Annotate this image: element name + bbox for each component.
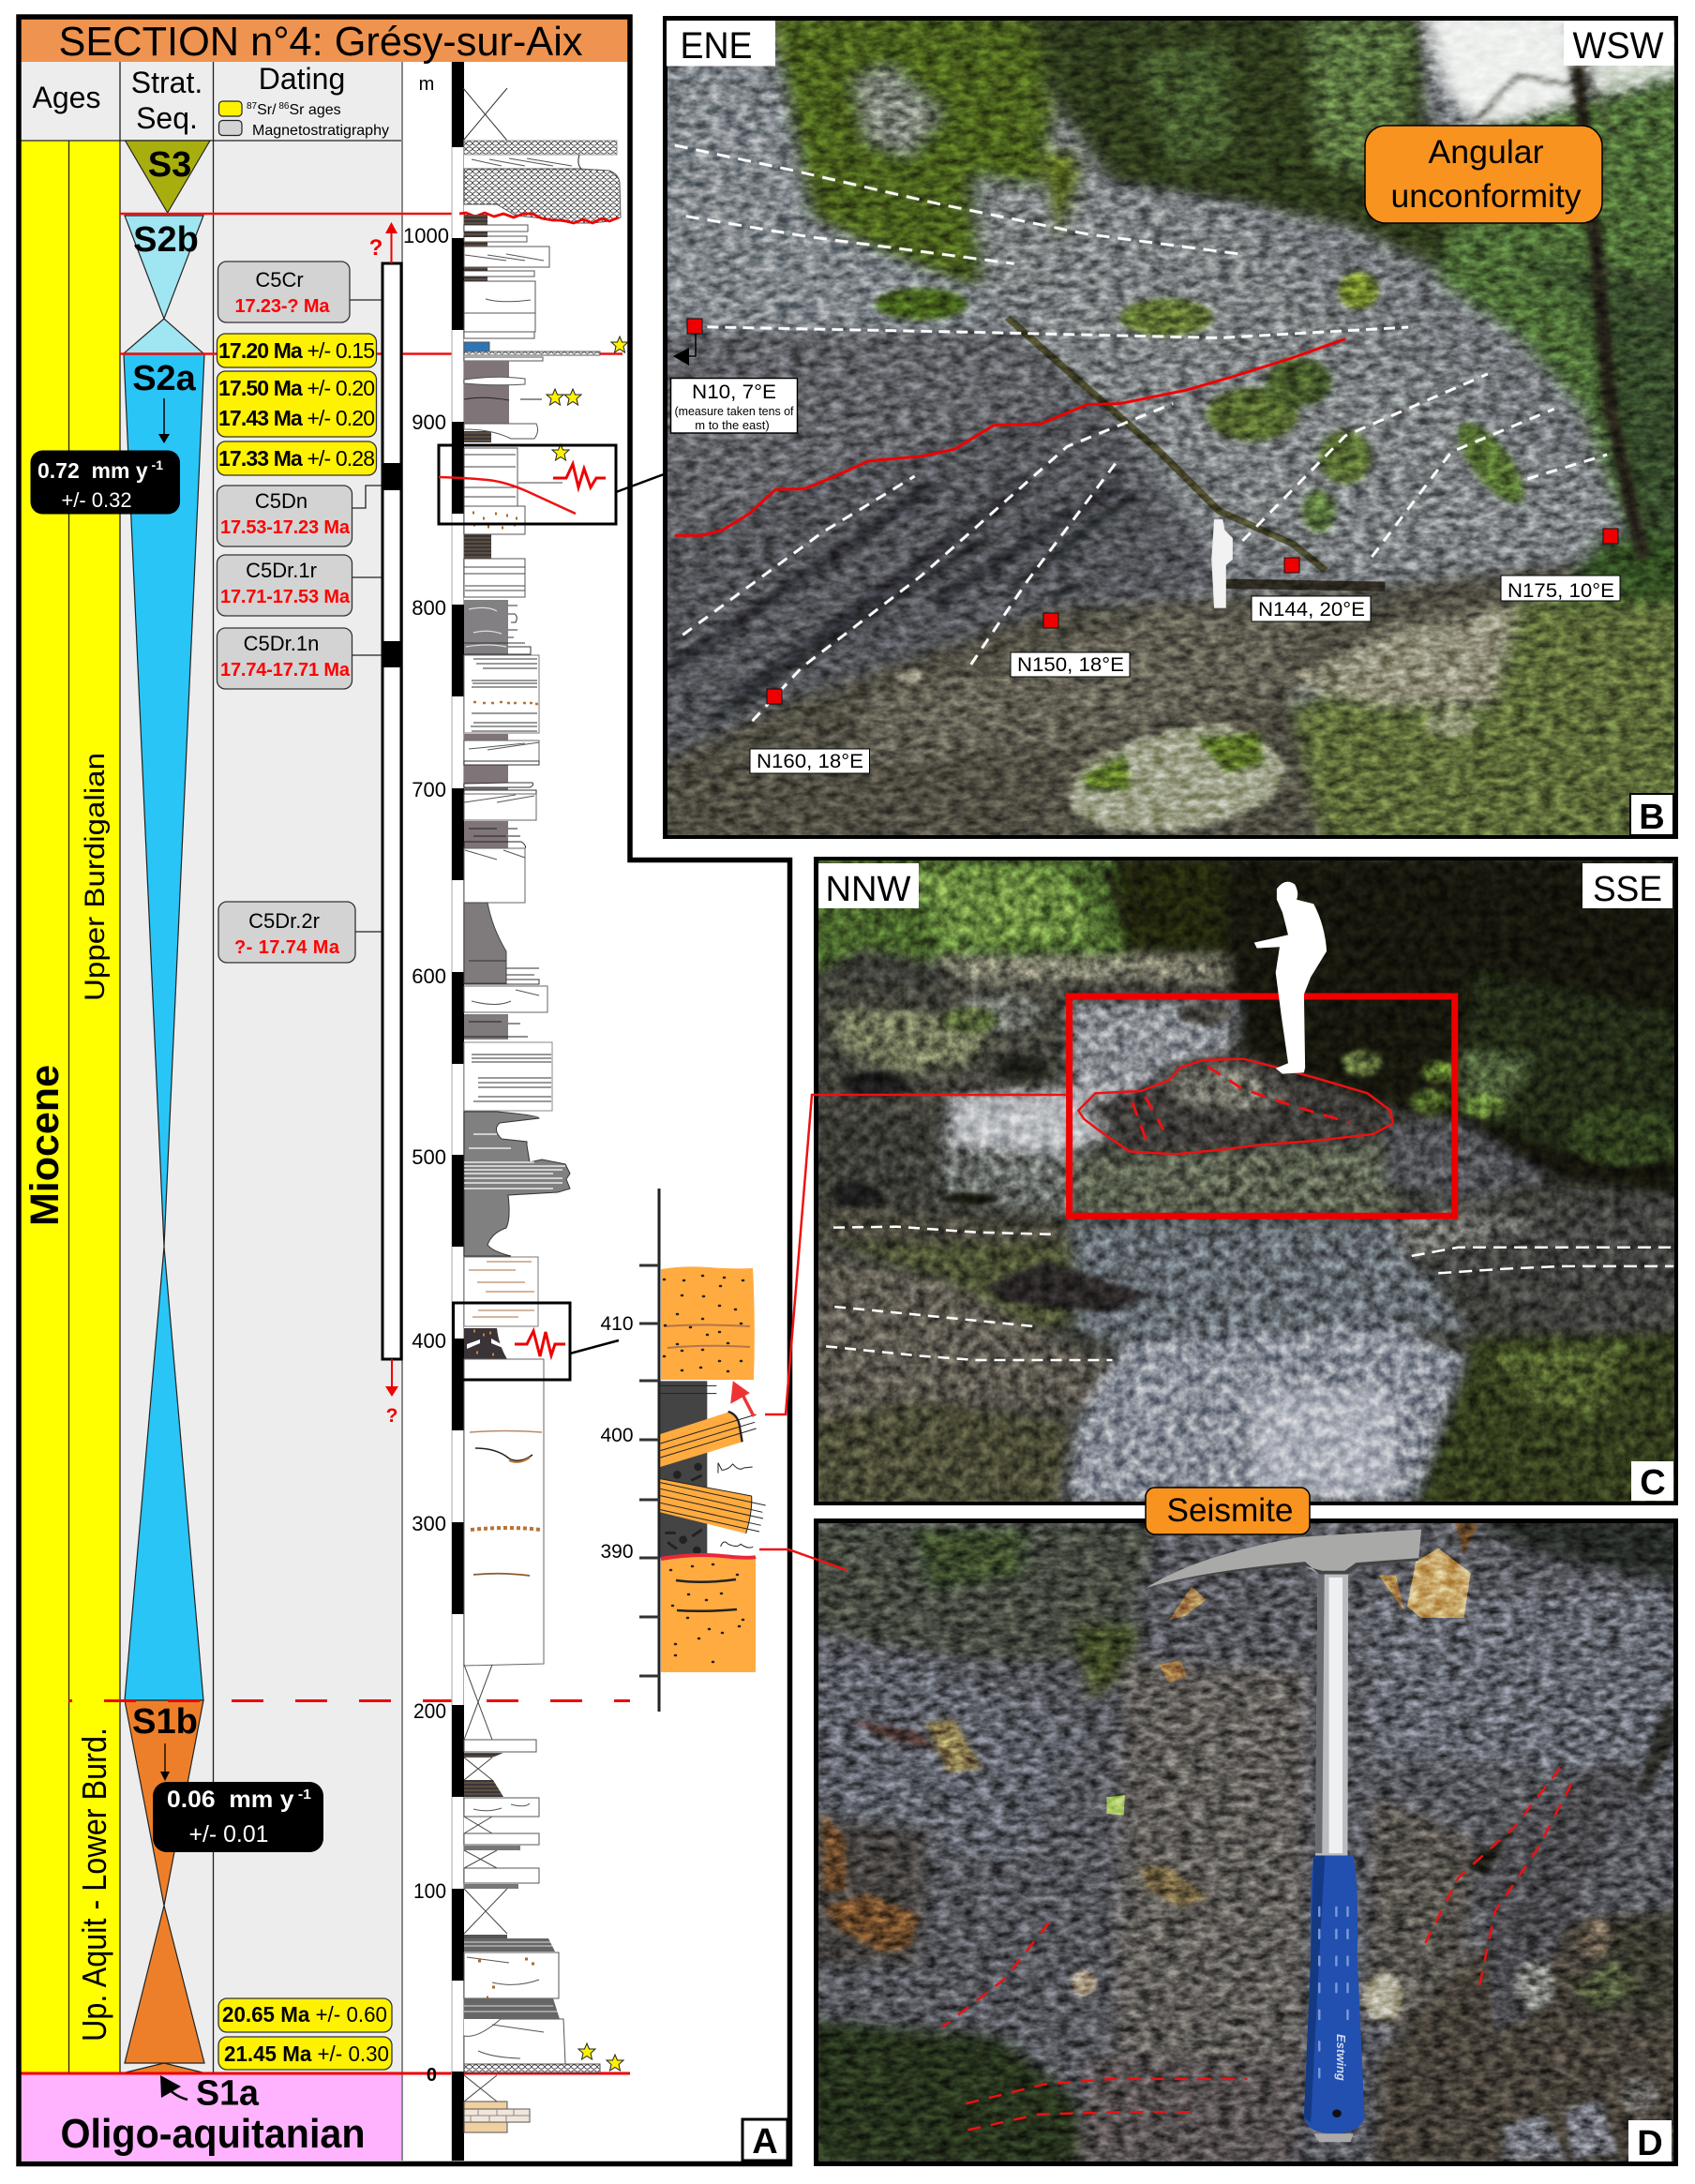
horizon lines [21, 214, 630, 2073]
panel D: hammer photo [806, 1517, 1685, 2172]
header: Dating with legend: Sr ages [289, 102, 341, 118]
panel label C: C [1640, 1463, 1666, 1503]
polarity column: ? [369, 235, 382, 261]
magnetostratigraphy box C5Dr.2r: C5Dr.2r [248, 909, 320, 933]
log: lower beds [464, 1740, 565, 2064]
magnetostratigraphy box C5Dr.1n: C5Dr.1n [244, 632, 319, 655]
label: N10: m to the east) [695, 418, 770, 432]
Sr age box 17.33: 17.33 Ma +/- 0.28 [218, 446, 375, 471]
photo B [656, 10, 1689, 845]
magnetostratigraphy box C5Dr.1r [218, 555, 352, 616]
log: interbedded grey 800 m [464, 600, 531, 654]
rate callout 0.72: 0.72 mm y [38, 458, 148, 483]
photo B: red unconformity line [675, 339, 1345, 535]
photo C [806, 857, 1685, 1519]
rate callout 0.72 [30, 398, 180, 514]
photo D [806, 1517, 1685, 2172]
magnetostratigraphy box C5Cr [218, 262, 350, 322]
rate callout 0.06: +/- 0.01 [189, 1821, 268, 1847]
photo C: red outlined boulder [1078, 1059, 1393, 1155]
Sr age box 17.50 and 17.43: 17.43 Ma +/- 0.20 [218, 406, 375, 430]
header: Dating with legend: Sr/ [257, 102, 277, 118]
arrow: S1a pointer [160, 2075, 188, 2100]
log: upper conglomerates [459, 88, 621, 223]
sequence labels [132, 145, 260, 2113]
panel A: stratigraphic section [19, 17, 789, 2163]
metre scale numbers [403, 224, 449, 2086]
magnetostratigraphy box C5Dr.1n [218, 628, 352, 689]
photo B: boulder [894, 613, 1511, 831]
label: N150: N150, 18°E [1017, 654, 1124, 676]
magnetostratigraphy box C5Dr.1r: C5Dr.1r [246, 559, 317, 582]
log: interbedded grey 500 m [464, 1112, 570, 1256]
vertical age labels: Up. Aquit - Lower Burd. [75, 1728, 113, 2042]
label: N160: N160, 18°E [757, 751, 863, 772]
magnetostratigraphy box C5Dr.1r: 17.71-17.53 Ma [220, 587, 351, 607]
label: Oligo-aquitanian: Oligo-aquitanian [60, 2111, 366, 2157]
label: SSE: SSE [1593, 870, 1662, 909]
header: Dating with legend [219, 62, 389, 139]
panel label B [1630, 794, 1673, 837]
header: Strat. Seq.: Seq. [136, 101, 198, 135]
label: NNW: NNW [825, 870, 911, 909]
sequence labels: S1a [196, 2073, 260, 2113]
arrow: measure direction [673, 334, 696, 366]
sequence labels: S1b [132, 1702, 198, 1742]
metre scale numbers: 500 [412, 1145, 446, 1169]
log: basal conglomerate and pebbles [464, 2064, 600, 2072]
photo C: red frame [1070, 996, 1455, 1216]
metre scale numbers: 600 [412, 965, 446, 988]
brand text on hammer: Estwing [1334, 2034, 1348, 2081]
red connector: inset to panel C [765, 1095, 1067, 1414]
rate callout 0.06: -1 [293, 1787, 311, 1803]
log: thick white bed 350 to 200 m [464, 1359, 544, 1666]
label: N10: N10, 7°E [692, 381, 776, 403]
metre scale numbers: 700 [412, 778, 446, 801]
photo B: person silhouette [1211, 519, 1233, 608]
magnetostratigraphy box C5Dn [218, 486, 352, 546]
log: lower dark beds [464, 1753, 560, 2019]
column backgrounds [21, 62, 402, 2161]
photo C: red bedding dashes [1132, 1067, 1349, 1141]
red connector: inset to panel D [759, 1549, 847, 1570]
header: Dating with legend: 86 [277, 101, 290, 112]
metre scale bar [452, 62, 463, 2161]
Sr age box 17.20: 17.20 Ma +/- 0.15 [218, 338, 375, 363]
photo D: red dashed deformation traces [942, 1768, 1571, 2130]
label: N10: (measure taken tens of [675, 404, 794, 418]
label: N10 [671, 379, 797, 433]
callout: angular unconformity: Angular [1429, 134, 1544, 171]
header: metres: m [419, 74, 434, 95]
log: laminated bed 550 m [464, 1042, 552, 1111]
panel label A: A [752, 2122, 778, 2162]
photo C: white bedding traces [826, 1227, 1673, 1360]
sedimentary log [459, 88, 621, 2132]
panel label C [1631, 1461, 1673, 1503]
label: N144: N144, 20°E [1258, 599, 1365, 621]
log: seismite bed 400 m [464, 1328, 510, 1359]
rate callout 0.72: -1 [148, 457, 163, 472]
sequence labels: S2b [133, 220, 199, 260]
panel B: angular unconformity photo [656, 10, 1689, 845]
panel label A [742, 2119, 788, 2162]
panel A frame [19, 17, 789, 2163]
log: stacked shale and sandstone 700 m [464, 734, 539, 903]
vertical age labels: Upper Burdigalian [80, 753, 111, 1001]
log: sandy dots [472, 513, 518, 528]
magnetostratigraphy box C5Dr.1n: 17.74-17.71 Ma [220, 660, 351, 681]
rate callout 0.72: +/- 0.32 [61, 488, 132, 512]
connectors [350, 300, 382, 932]
panel label D: D [1637, 2124, 1663, 2163]
header: Dating with legend: Magnetostratigraphy [252, 123, 389, 139]
inset: lower sand bed [661, 1555, 756, 1672]
panel C: seismite outcrop photo [806, 857, 1685, 1519]
inset: upper sand bed [661, 1266, 755, 1380]
log: grey shale 900 m [464, 361, 542, 424]
label: N175 [1501, 576, 1620, 602]
panel label D [1628, 2120, 1672, 2163]
metre scale numbers: 900 [412, 411, 446, 434]
label: SSE [1582, 863, 1672, 909]
metre scale numbers: 200 [413, 1699, 446, 1723]
Sr age box 17.50 and 17.43: 17.50 Ma +/- 0.20 [218, 376, 375, 400]
inset detail log: 390 [600, 1541, 634, 1563]
red arrow: seismite up [732, 1384, 754, 1416]
Sr age box 20.65 [218, 1998, 392, 2032]
callout: angular unconformity: unconformity [1391, 178, 1582, 215]
metre scale numbers: 800 [412, 596, 446, 620]
log: grey wedge 650 m [464, 903, 548, 1040]
Sr age box 17.50 and 17.43 [218, 371, 377, 437]
rate callout 0.06: 0.06 mm y [167, 1787, 287, 1813]
Sr age box 21.45: 21.45 Ma +/- 0.30 [224, 2042, 389, 2066]
metre scale numbers: 300 [412, 1512, 446, 1535]
stars: dated samples [547, 337, 628, 2071]
title: SECTION n°4: Grésy-sur-Aix [58, 19, 583, 65]
sequence labels: S3 [148, 145, 191, 185]
metre scale numbers: 400 [412, 1329, 446, 1353]
header: Dating with legend: 87 [247, 101, 258, 112]
header: Strat. Seq.: Strat. [131, 66, 202, 99]
header: Strat. Seq. [131, 66, 202, 135]
photo D: hammer [1147, 1530, 1421, 2142]
log: lower covered intervals [464, 1665, 507, 2102]
inset detail log: 400 [600, 1425, 634, 1446]
log: basal limestone [464, 2102, 530, 2132]
zoom box: upper seismite interval [439, 445, 664, 524]
vertical age labels [22, 753, 113, 2042]
inset detail log: 410 [600, 1313, 634, 1335]
callout: seismite: Seismite [1166, 1492, 1294, 1529]
zoom box: lower seismite interval [454, 1303, 619, 1380]
callout: angular unconformity [1365, 126, 1602, 223]
header: Dating with legend: Dating [259, 62, 345, 96]
Sr age box 20.65: 20.65 Ma +/- 0.60 [222, 2002, 387, 2027]
callout: seismite [1146, 1488, 1310, 1534]
vertical age labels: Miocene [22, 1065, 68, 1226]
photo B: white bedding traces [675, 145, 1607, 721]
polarity column: ? [386, 1405, 398, 1427]
log: laminated bed 750 m [464, 655, 539, 733]
sequence triangles [122, 141, 210, 2073]
label: ENE: ENE [681, 25, 752, 67]
sequence labels: S2a [132, 359, 197, 398]
header: Ages: Ages [33, 81, 100, 114]
metre scale numbers: 1000 [403, 224, 449, 247]
photo B: measure markers [687, 319, 1618, 704]
inset: deformed interval [660, 1381, 766, 1558]
inset detail log [600, 1189, 766, 1712]
log: tan-lined bed 450 m [464, 1257, 538, 1326]
rate callout 0.06 [153, 1743, 323, 1852]
magnetostratigraphy box C5Dr.2r: ?- 17.74 Ma [234, 937, 340, 958]
log: dark thin beds [464, 215, 491, 559]
magnetostratigraphy box C5Cr: C5Cr [255, 268, 304, 292]
panel label B: B [1639, 798, 1665, 837]
label: N175: N175, 10°E [1508, 580, 1614, 602]
magnetostratigraphy box C5Cr: 17.23-? Ma [234, 296, 330, 317]
metre scale numbers: 0 [427, 2065, 437, 2086]
metre scale numbers: 100 [413, 1879, 446, 1903]
label: ENE [667, 21, 775, 67]
log: beds below 900 m [464, 424, 562, 597]
magnetostratigraphy box C5Dn: C5Dn [255, 489, 308, 513]
magnetostratigraphy box C5Dr.2r [218, 902, 355, 963]
polarity column [369, 222, 402, 1427]
log: beds 1000 to 900 m [464, 225, 600, 361]
label: WSW: WSW [1573, 25, 1664, 67]
magnetostratigraphy box C5Dn: 17.53-17.23 Ma [220, 517, 351, 538]
photo C: geologist silhouette [1254, 882, 1327, 1074]
